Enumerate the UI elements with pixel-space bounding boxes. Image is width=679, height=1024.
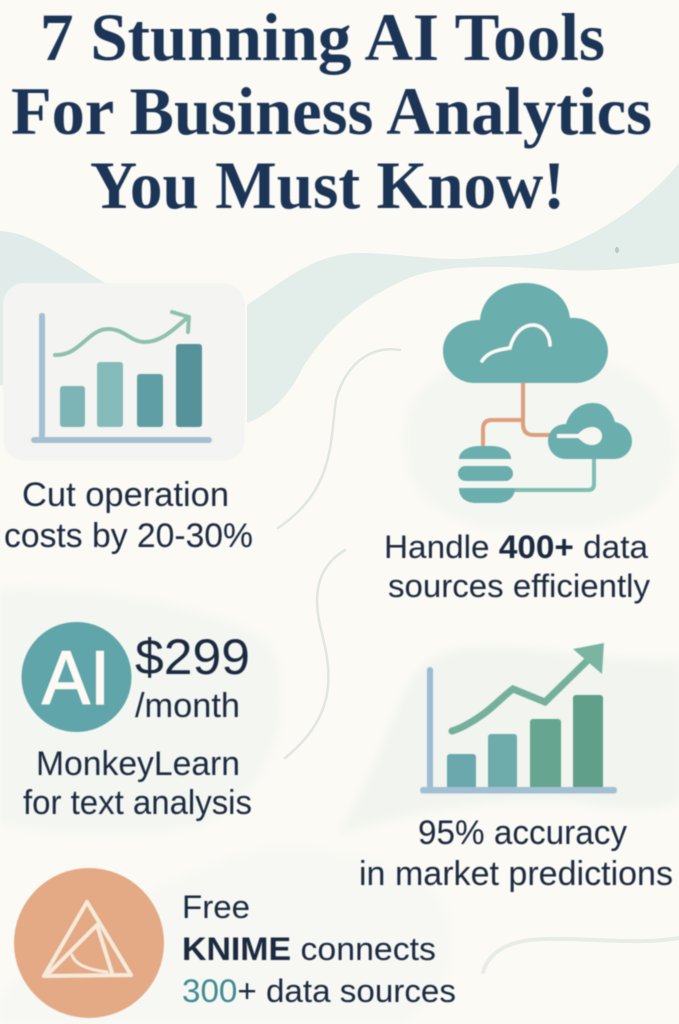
icon: KNIME triangle badge <box>14 868 164 1018</box>
text: MonkeyLearn description: MonkeyLearn <box>36 745 240 783</box>
text: cut operation costs: costs by 20-30% <box>4 517 253 555</box>
title <box>11 0 652 223</box>
decorative connector curves <box>278 349 679 972</box>
title: 7 Stunning AI Tools <box>40 0 605 75</box>
text: market prediction accuracy: 95% accuracy <box>418 814 627 852</box>
panel: cut operation costs <box>3 283 253 555</box>
text: market prediction accuracy: in market predictions <box>359 855 673 893</box>
panel: handle data sources <box>384 283 650 604</box>
text: KNIME description: KNIME connects <box>182 931 436 967</box>
price <box>135 629 250 725</box>
panel: KNIME data sources <box>14 868 456 1018</box>
price: /month <box>135 687 240 725</box>
chart card background <box>3 283 245 461</box>
icon: bar chart with trend arrow <box>31 312 212 443</box>
text: KNIME description: 300+ data sources <box>182 973 456 1009</box>
panel: market prediction accuracy <box>359 643 673 893</box>
text: cut operation costs: Cut operation <box>22 476 229 514</box>
text: KNIME description: Free <box>182 889 250 925</box>
text: KNIME description <box>182 889 456 1009</box>
text: handle data sources <box>384 529 650 604</box>
text: MonkeyLearn description <box>23 745 252 822</box>
icon: AI badge: AI <box>42 636 110 721</box>
icon: rising bar chart <box>420 643 617 794</box>
text: handle data sources: Handle 400+ data <box>384 529 648 565</box>
panel: MonkeyLearn pricing <box>22 622 252 822</box>
text: market prediction accuracy <box>359 814 673 893</box>
title: You Must Know! <box>90 147 565 223</box>
icon: cloud network <box>443 283 632 503</box>
title: For Business Analytics <box>11 73 652 149</box>
icon: AI badge <box>22 622 132 732</box>
text: cut operation costs <box>4 476 253 555</box>
text: MonkeyLearn description: for text analysis <box>23 784 252 822</box>
text: handle data sources: sources efficiently <box>388 568 650 604</box>
price: $299 <box>135 629 250 685</box>
